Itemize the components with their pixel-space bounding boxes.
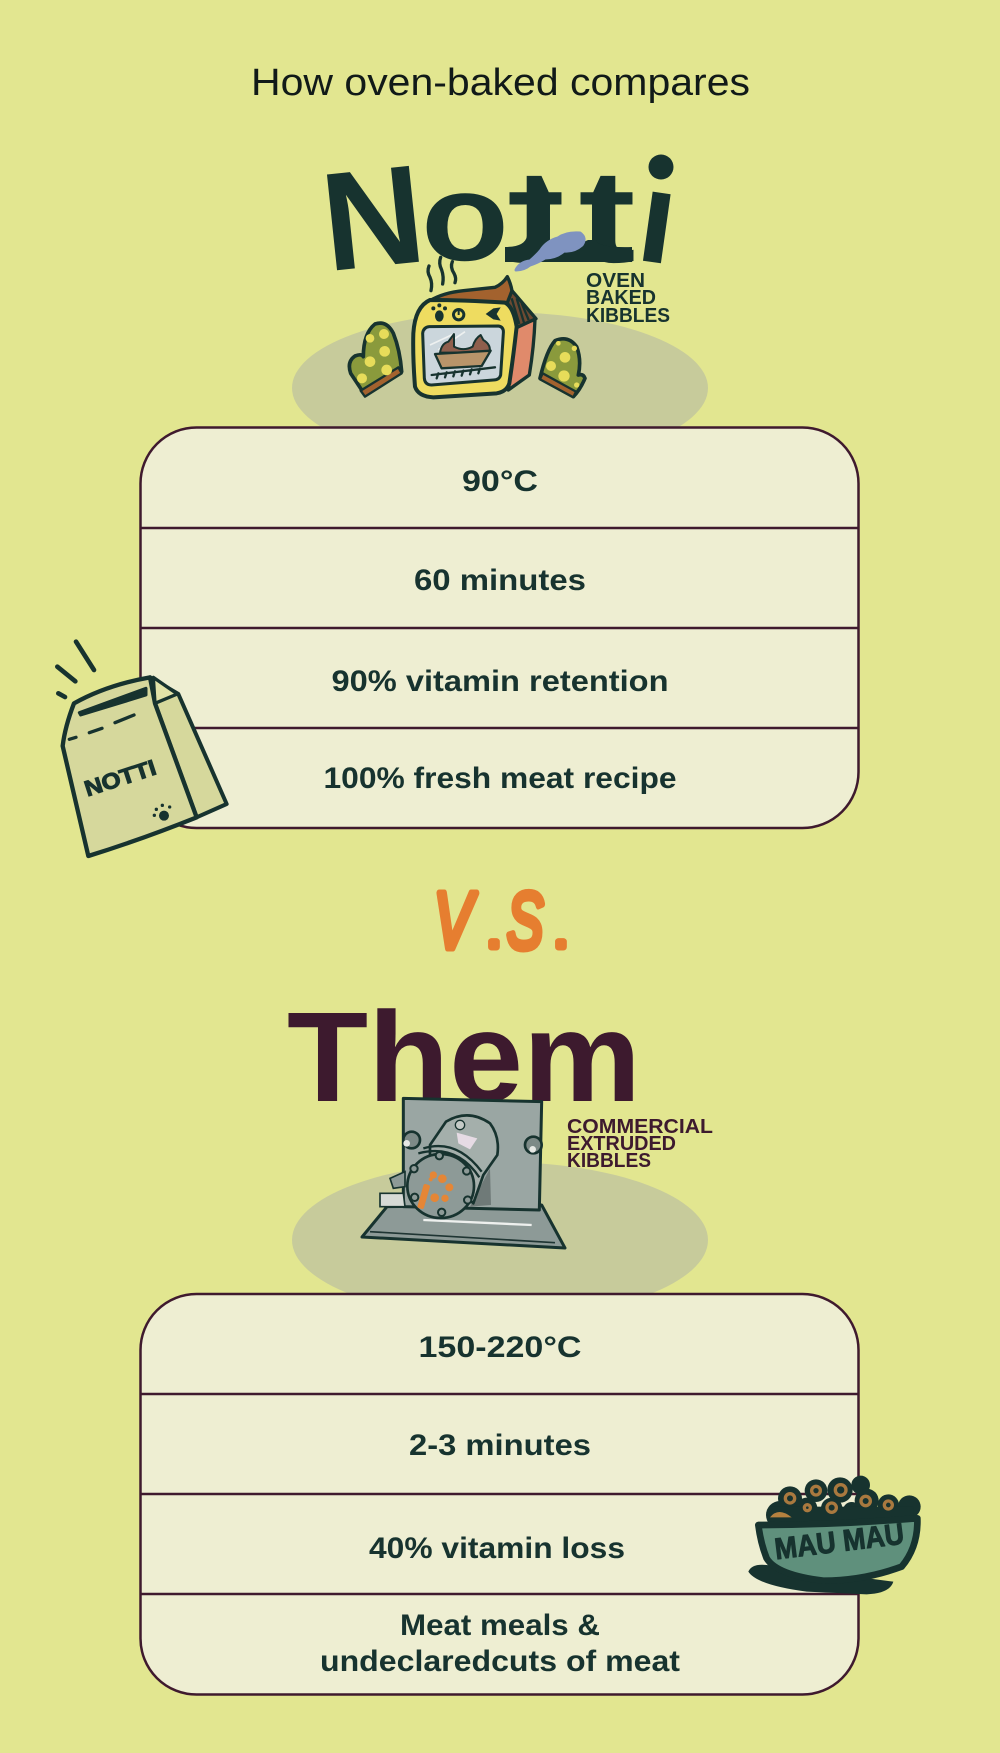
row: recipe: Meat meals & xyxy=(400,1609,600,1642)
side fitting xyxy=(380,1193,405,1207)
icon: Notti bag xyxy=(57,642,227,856)
motor shadow xyxy=(470,1168,491,1207)
right mitt xyxy=(540,339,585,397)
motor bands xyxy=(418,1146,482,1177)
panel background xyxy=(140,1294,858,1694)
oven front xyxy=(413,300,517,397)
icon: steam cloud xyxy=(516,233,584,270)
label: commercial extruded kibbles: EXTRUDED xyxy=(567,1133,676,1155)
label: oven baked kibbles: BAKED xyxy=(586,287,656,309)
glass highlight xyxy=(430,332,465,350)
row: temperature: 150-220°C xyxy=(418,1331,582,1364)
vent xyxy=(507,291,536,327)
row: temperature: 90°C xyxy=(462,465,538,498)
oven controls xyxy=(431,303,501,322)
bag side xyxy=(150,677,227,817)
bolts xyxy=(403,1132,542,1153)
icon: extruder machine xyxy=(362,1098,565,1248)
panel background xyxy=(140,428,858,828)
heading: Them: Them xyxy=(287,986,641,1129)
panel: Them comparison table xyxy=(140,1294,859,1694)
label: commercial extruded kibbles: KIBBLES xyxy=(567,1150,651,1172)
icon: oven with mitts xyxy=(349,257,585,397)
row: recipe: undeclaredcuts of meat xyxy=(320,1645,680,1678)
row: time: 60 minutes xyxy=(414,564,586,597)
heat waves xyxy=(428,257,456,291)
bag fold xyxy=(79,688,146,715)
motor face xyxy=(407,1154,474,1218)
panel: Notti comparison table xyxy=(140,428,859,828)
row: recipe xyxy=(320,1609,680,1678)
food xyxy=(440,334,490,353)
oven window xyxy=(423,326,503,385)
orange kibbles xyxy=(417,1171,453,1209)
sparkle lines xyxy=(57,642,94,697)
back plate xyxy=(403,1098,542,1210)
row: vitamins: 40% vitamin loss xyxy=(369,1532,625,1565)
left mitt xyxy=(349,323,402,397)
motor body xyxy=(430,1115,498,1203)
row: vitamins: 90% vitamin retention xyxy=(332,665,668,698)
label: commercial extruded kibbles: COMMERCIAL xyxy=(567,1116,713,1138)
heading: v.s.: S xyxy=(507,877,543,966)
bag front xyxy=(63,677,197,856)
Notti logo: t xyxy=(578,143,636,290)
label: oven baked kibbles: OVEN xyxy=(586,270,645,292)
label: commercial extruded kibbles xyxy=(567,1116,713,1172)
label: oven baked kibbles: KIBBLES xyxy=(586,305,670,327)
Notti logo xyxy=(327,154,674,270)
row: recipe: 100% fresh meat recipe xyxy=(324,762,676,795)
baking tray xyxy=(435,351,491,368)
Notti logo: t xyxy=(506,143,564,290)
base plate xyxy=(362,1205,565,1248)
bowl label: MAU MAU xyxy=(773,1518,906,1566)
backdrop ellipse: Notti xyxy=(292,312,708,464)
title: How oven-baked compares xyxy=(251,62,750,104)
kibble pile xyxy=(766,1476,921,1529)
paw xyxy=(153,804,171,821)
shadow xyxy=(748,1565,893,1594)
heading: v.s. xyxy=(434,876,568,966)
row: time: 2-3 minutes xyxy=(409,1429,591,1462)
Notti logo: o xyxy=(421,148,509,287)
Notti logo: N xyxy=(314,134,431,301)
Notti logo: i xyxy=(630,142,687,292)
bowl xyxy=(758,1518,917,1581)
oven roof xyxy=(430,277,512,303)
rack xyxy=(432,367,495,378)
heading: v.s.: V xyxy=(434,876,477,965)
icon: kibble bowl xyxy=(748,1476,921,1594)
label: oven baked kibbles xyxy=(586,270,670,327)
oven side xyxy=(508,319,535,390)
heading: v.s.: . xyxy=(487,902,501,958)
heading: v.s.: . xyxy=(554,902,568,958)
backdrop ellipse: Them xyxy=(292,1162,708,1318)
bag label: NOTTI xyxy=(81,755,159,801)
